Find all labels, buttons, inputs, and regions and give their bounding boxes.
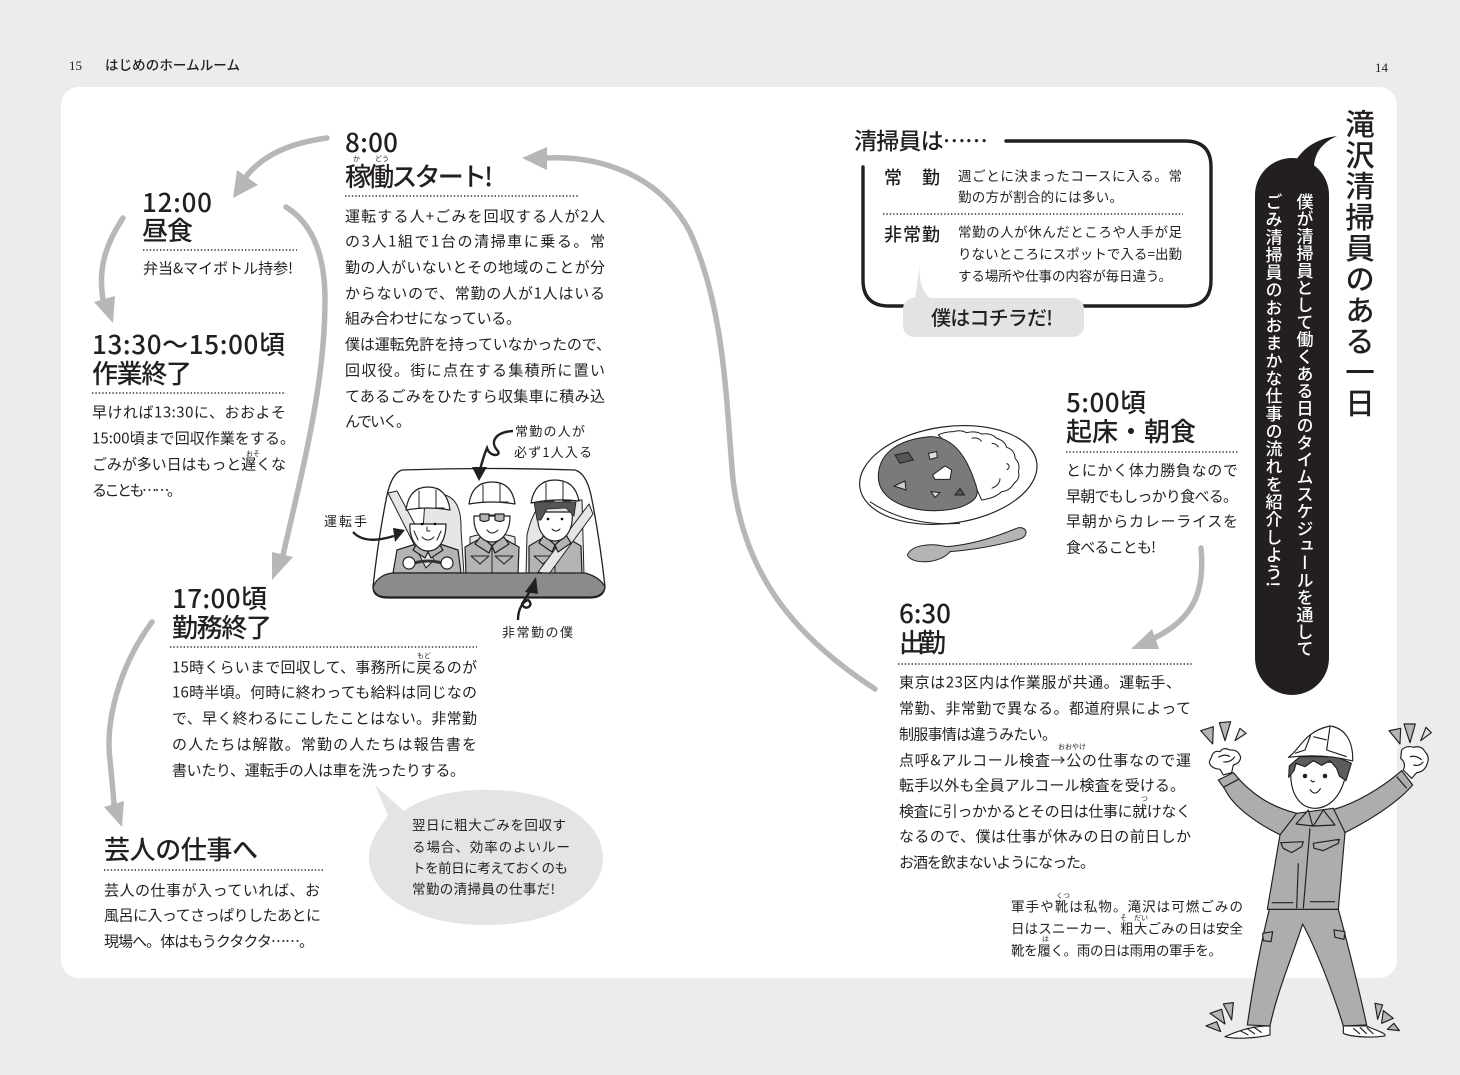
body text xyxy=(899,672,1191,873)
legs xyxy=(1247,909,1367,1026)
furigana: おおやけ xyxy=(1058,742,1086,752)
shoes xyxy=(1225,1026,1270,1038)
arrow: 6:30 to 8:00 xyxy=(522,147,875,689)
body text: 15時くらいまで回収して、事務所に戻るのが xyxy=(172,657,477,678)
body text: 僕は運転免許を持っていなかったので、 xyxy=(345,334,611,355)
definition: non-regular: りないところにスポットで入る=出勤 xyxy=(958,243,1182,263)
section: 12:00 lunch xyxy=(142,183,297,279)
body text: 早朝でもしっかり食べる。 xyxy=(1066,486,1238,507)
body text xyxy=(1066,460,1238,558)
furigana: だい xyxy=(1134,913,1148,923)
furigana xyxy=(1042,891,1148,944)
heading: 作業終了 xyxy=(92,354,192,391)
windshield xyxy=(373,468,605,598)
term: regular: 勤 xyxy=(922,164,940,190)
term: regular xyxy=(884,164,940,190)
definition: regular xyxy=(958,165,1182,206)
note: gloves and shoes: 靴を履く。雨の日は雨用の軍手を。 xyxy=(1011,940,1222,960)
box: regular and non-regular xyxy=(854,122,1211,337)
heading: 5:00頃 xyxy=(1066,383,1146,420)
body text xyxy=(172,657,477,781)
furigana: そ xyxy=(1120,913,1127,923)
black speech bubble lead xyxy=(1255,136,1337,695)
furigana xyxy=(1058,742,1148,804)
illustration: three workers in truck cab xyxy=(324,421,605,641)
box outline xyxy=(863,141,1211,306)
label: non-regular me: 非常勤の僕 xyxy=(502,622,573,641)
dashboard xyxy=(373,573,605,597)
body text: てあるごみをひたすら収集車に積み込 xyxy=(345,386,605,407)
definition: non-regular: する場所や仕事の内容が毎日違う。 xyxy=(958,265,1172,285)
body text: 運転する人+ごみを回収する人が2人 xyxy=(345,206,605,227)
body text: 検査に引っかかるとその日は仕事に就けなく xyxy=(899,801,1191,822)
body text: 常勤、非常勤で異なる。都道府県によって xyxy=(899,698,1191,719)
body text: 組み合わせになっている。 xyxy=(345,308,521,329)
seats xyxy=(420,495,584,575)
heading: 6:30 xyxy=(899,594,951,631)
label: driver: 運転手 xyxy=(324,511,367,530)
arrow: 12:00 to 13:30 xyxy=(94,218,123,323)
term: non-regular: 非常勤 xyxy=(884,221,940,247)
definition: non-regular xyxy=(958,221,1182,285)
body text: 書いたり、運転手の人は車を洗ったりする。 xyxy=(172,760,465,781)
jacket xyxy=(1267,808,1345,909)
body text: んでいく。 xyxy=(345,411,411,432)
body text: なるので、僕は仕事が休みの日の前日しか xyxy=(899,826,1191,847)
definition: regular: 勤の方が割合的には多い。 xyxy=(958,186,1123,206)
left page header: はじめのホームルーム xyxy=(105,54,240,74)
speech bubble: bulky waste route: トを前日に考えておくのも xyxy=(412,857,568,877)
furigana: どう xyxy=(375,154,389,164)
arms xyxy=(1218,773,1297,835)
arrow: 5:00 to 6:30 xyxy=(1131,548,1202,649)
black speech bubble lead: ごみ清掃員のおおまかな仕事の流れを紹介しよう! xyxy=(1262,193,1286,588)
body text: 早ければ13:30に、おおよそ xyxy=(92,402,286,423)
callout: this is me: 僕はコチラだ! xyxy=(931,302,1053,331)
box heading: 清掃員は…… xyxy=(854,122,988,156)
section: 17:00 end of work xyxy=(170,579,477,781)
section: 6:30 going to work xyxy=(898,594,1192,873)
heading: 勤務終了 xyxy=(172,608,272,645)
arrow: 13:30 to 17:00 xyxy=(272,207,325,580)
white page panel xyxy=(61,87,1397,978)
definition: regular: 週ごとに決まったコースに入る。常 xyxy=(958,165,1182,185)
body text: お酒を飲まないようになった。 xyxy=(899,852,1095,873)
section: 13:30-15:00 xyxy=(92,325,295,501)
section: 8:00 start of work xyxy=(345,123,611,432)
curry xyxy=(878,437,977,511)
body text: 転手以外も全員アルコール検査を受ける。 xyxy=(899,775,1185,796)
label: regular staff: 必ず1人入る xyxy=(514,442,592,461)
body text: 東京は23区内は作業服が共通。運転手、 xyxy=(899,672,1181,693)
body text xyxy=(345,206,611,432)
heading: 12:00 xyxy=(142,183,212,220)
body text: 16時半頃。何時に終わっても給料は同じなの xyxy=(172,682,477,703)
helmet xyxy=(1288,726,1353,761)
body text: 芸人の仕事が入っていれば、お xyxy=(104,880,320,901)
speech bubble: bulky waste route: 翌日に粗大ごみを回収す xyxy=(412,814,566,834)
term: regular: 常 xyxy=(884,164,902,190)
speech bubble: bulky waste route xyxy=(369,785,603,925)
heading: 起床・朝食 xyxy=(1066,412,1196,449)
section: 5:00 wake up xyxy=(1066,383,1239,558)
body text: からないので、常勤の人が1人はいる xyxy=(345,283,605,304)
speech bubble: bulky waste route: 常勤の清掃員の仕事だ! xyxy=(412,878,555,898)
eyes and smile xyxy=(1303,774,1307,778)
speech bubble: bulky waste route: る場合、効率のよいルー xyxy=(412,836,570,856)
note: gloves and shoes: 日はスニーカー、粗大ごみの日は安全 xyxy=(1011,918,1244,938)
heading: 8:00: 8:00 xyxy=(345,123,398,160)
body text: 制服事情は違うみたい。 xyxy=(899,724,1057,745)
body text: で、早く終わるにこしたことはない。非常勤 xyxy=(172,708,477,729)
right page number: 14 xyxy=(1375,60,1388,75)
section: to comedian job xyxy=(104,830,323,952)
rice xyxy=(938,431,1019,500)
spark marks xyxy=(1201,722,1431,1032)
body text: 風呂に入ってさっぱりしたあとに xyxy=(104,905,321,926)
heading: 17:00頃 xyxy=(172,579,267,616)
body text: 早朝からカレーライスを xyxy=(1066,511,1238,532)
face xyxy=(1291,760,1345,808)
heading: 出勤 xyxy=(899,623,946,660)
body text: 食べることも! xyxy=(1066,537,1156,558)
label: regular staff: 常勤の人が xyxy=(515,421,585,440)
heading: 昼食 xyxy=(142,211,193,248)
body text: とにかく体力勝負なので xyxy=(1066,460,1238,481)
illustration: cheering worker xyxy=(1201,722,1431,1038)
body text: 回収役。街に点在する集積所に置い xyxy=(345,360,605,381)
note: gloves and shoes: 軍手や靴は私物。滝沢は可燃ごみの xyxy=(1011,896,1243,916)
curly arrow to driver xyxy=(353,528,405,542)
label: regular staff xyxy=(514,421,592,461)
curly arrow to center xyxy=(472,431,513,481)
worker: me xyxy=(529,480,593,575)
furigana: くつ xyxy=(1056,891,1070,901)
furigana xyxy=(353,154,389,164)
body text: の3人1組で1台の清掃車に乗る。常 xyxy=(345,231,605,252)
worker: driver xyxy=(388,487,461,573)
heading: 芸人の仕事へ xyxy=(104,830,258,867)
body text: の人たちは解散。常勤の人たちは報告書を xyxy=(172,734,477,755)
body text xyxy=(92,402,295,501)
furigana: もど xyxy=(417,651,431,661)
vertical title: 滝沢清掃員のある一日 xyxy=(1339,109,1381,419)
body text: ごみが多い日はもっと遅くな xyxy=(92,454,286,475)
arrow: 17:00 to next job xyxy=(104,622,152,827)
furigana: おそ xyxy=(246,449,260,459)
fists xyxy=(1209,749,1241,775)
body text: 弁当&マイボトル持参! xyxy=(143,258,293,279)
definition: non-regular: 常勤の人が休んだところや人手が足 xyxy=(958,221,1182,241)
arrow: 8:00 to 12:00 xyxy=(233,138,327,198)
illustration: curry plate and spoon xyxy=(853,415,1044,562)
curly arrow to me xyxy=(518,577,538,620)
note: gloves and shoes xyxy=(1011,891,1244,960)
heading: 稼働スタート: 稼働スタート! xyxy=(345,157,493,194)
body text: 勤の人がいないとその地域のことが分 xyxy=(345,257,605,278)
collar xyxy=(1296,810,1335,826)
worker: regular staff with glasses xyxy=(465,482,519,575)
black speech bubble lead: 僕が清掃員として働くある日のタイムスケジュールを通して xyxy=(1292,193,1318,657)
hair xyxy=(1289,757,1351,781)
body text: 点呼&アルコール検査→公の仕事なので運 xyxy=(899,750,1191,771)
callout: this is me xyxy=(903,262,1084,337)
body text xyxy=(104,880,321,952)
heading: 13:30〜15:00頃 xyxy=(92,325,285,362)
furigana: は xyxy=(1042,934,1049,944)
body text: ることも……。 xyxy=(92,480,182,501)
body text: 現場へ。体はもうクタクタ……。 xyxy=(104,931,314,952)
spoon xyxy=(907,528,1026,562)
furigana: か xyxy=(353,154,360,164)
furigana: つ xyxy=(1141,794,1148,804)
body text: 15:00頃まで回収作業をする。 xyxy=(92,428,295,449)
left page header: 15 xyxy=(69,58,82,73)
